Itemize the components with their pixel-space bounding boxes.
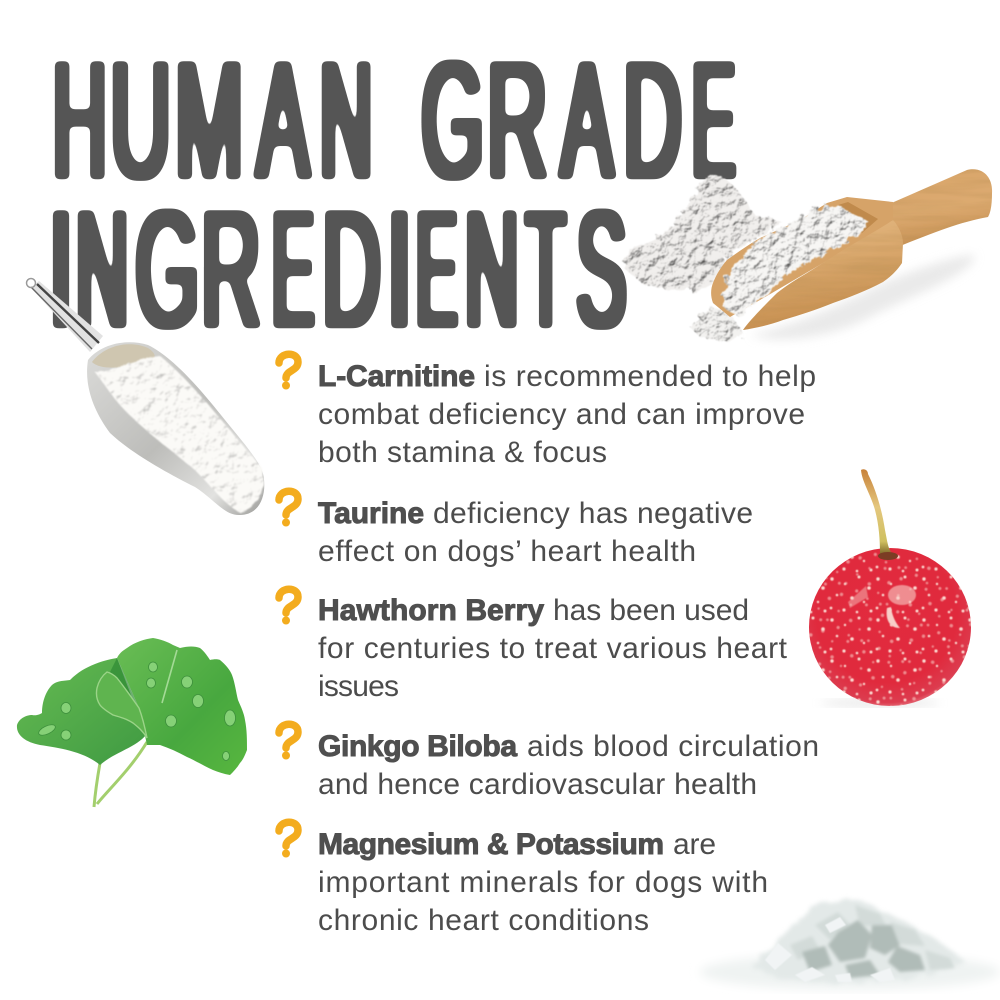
powder in scoop — [723, 206, 870, 317]
text block — [318, 497, 753, 568]
item: L-Carnitine — [279, 354, 816, 469]
title line 1: HUMAN GRADE: N — [319, 28, 373, 212]
mid flakes — [790, 905, 955, 970]
item: Ginkgo Biloba — [279, 724, 819, 801]
stems — [94, 742, 147, 807]
leaf slit — [162, 650, 177, 703]
scoop bowl — [87, 342, 264, 515]
icon: question mark — [279, 589, 298, 624]
shadow — [820, 699, 940, 707]
title line 1: HUMAN GRADE: A — [257, 28, 309, 212]
dark wedge — [110, 658, 146, 735]
dark flakes — [802, 920, 925, 978]
scattered powder — [690, 307, 743, 340]
text block: effect on dogs’ heart health — [318, 535, 696, 568]
flour — [95, 356, 263, 512]
text block — [318, 730, 819, 801]
handle ring — [26, 278, 36, 288]
berry body — [809, 548, 971, 706]
title line 2: INGREDIENTS: E — [416, 177, 457, 361]
powder pile behind — [623, 176, 780, 290]
title line 2: INGREDIENTS: I — [386, 177, 413, 361]
text block — [318, 828, 768, 937]
shadow — [750, 255, 975, 339]
title line 2: INGREDIENTS: E — [272, 177, 314, 361]
image: metal scoop with flour — [26, 278, 264, 515]
salt mound — [750, 899, 965, 982]
item: Hawthorn Berry — [279, 589, 788, 703]
title line 2: INGREDIENTS: I — [48, 177, 74, 361]
title line 2: INGREDIENTS: T — [526, 177, 566, 361]
text block: is recommended to help — [484, 360, 816, 393]
image: wooden scoop with white powder — [623, 169, 992, 340]
icon: question mark — [279, 724, 298, 760]
title line 2: INGREDIENTS: N — [464, 177, 519, 361]
text block: both stamina & focus — [318, 436, 607, 469]
text block: and hence cardiovascular health — [318, 768, 757, 801]
scoop front face — [743, 220, 903, 330]
text block: chronic heart conditions — [318, 904, 649, 937]
stem — [861, 469, 891, 554]
right leaf — [117, 638, 247, 775]
title line 1: HUMAN GRADE: R — [487, 28, 548, 212]
text block — [318, 360, 816, 469]
image: hawthorn berry — [809, 469, 971, 708]
title: S — [576, 177, 626, 361]
text block: L-Carnitine — [318, 360, 475, 393]
scoop handle — [880, 169, 992, 248]
title line 1: HUMAN GRADE: H — [52, 28, 107, 212]
title line 1: HUMAN GRADE: U — [110, 28, 171, 212]
item: Magnesium & Potassium — [279, 822, 768, 937]
title — [48, 28, 735, 361]
text block: for centuries to treat various heart — [318, 632, 788, 665]
text block: Magnesium & Potassium — [318, 828, 664, 861]
text block: Ginkgo Biloba — [318, 730, 517, 763]
scoop inner tip — [838, 202, 878, 233]
text: E — [692, 28, 735, 212]
calyx — [878, 552, 898, 560]
scoop handle — [31, 281, 103, 352]
surrounding flakes haze — [700, 954, 1000, 990]
icon: question mark — [279, 491, 298, 526]
scoop back tint — [92, 344, 155, 368]
title line 2: INGREDIENTS: D — [322, 177, 381, 361]
text block: aids blood circulation — [527, 730, 819, 763]
left leaf — [17, 658, 146, 765]
scoop back rim — [711, 197, 893, 317]
speckles — [810, 548, 971, 706]
small lobe — [96, 672, 147, 738]
text block: are — [673, 828, 716, 861]
text block: Taurine — [318, 497, 424, 530]
image: ginkgo leaf — [17, 638, 247, 807]
text block: has been used — [553, 594, 749, 627]
title line 1: HUMAN GRADE: A — [561, 28, 613, 212]
text block: important minerals for dogs with — [318, 866, 768, 899]
title line 2: INGREDIENTS: G — [135, 177, 200, 361]
title line 1: HUMAN GRADE: M — [175, 28, 244, 212]
title line 2: INGREDIENTS: N — [75, 177, 129, 361]
title line 1: HUMAN GRADE: G — [421, 28, 484, 212]
text block: Hawthorn Berry — [318, 594, 544, 627]
light flakes — [765, 917, 895, 982]
text block: deficiency has negative — [433, 497, 753, 530]
water drops — [37, 662, 236, 760]
item: Taurine — [279, 491, 753, 568]
text block: issues — [318, 670, 399, 703]
image: salt flakes pile — [700, 899, 1000, 990]
icon: question mark — [279, 822, 298, 858]
text block: combat deficiency and can improve — [318, 398, 805, 431]
title line 2: INGREDIENTS: R — [201, 177, 261, 361]
icon: question mark — [279, 354, 298, 390]
highlights — [848, 585, 916, 628]
text block — [318, 594, 788, 703]
title line 1: HUMAN GRADE: D — [623, 28, 682, 212]
